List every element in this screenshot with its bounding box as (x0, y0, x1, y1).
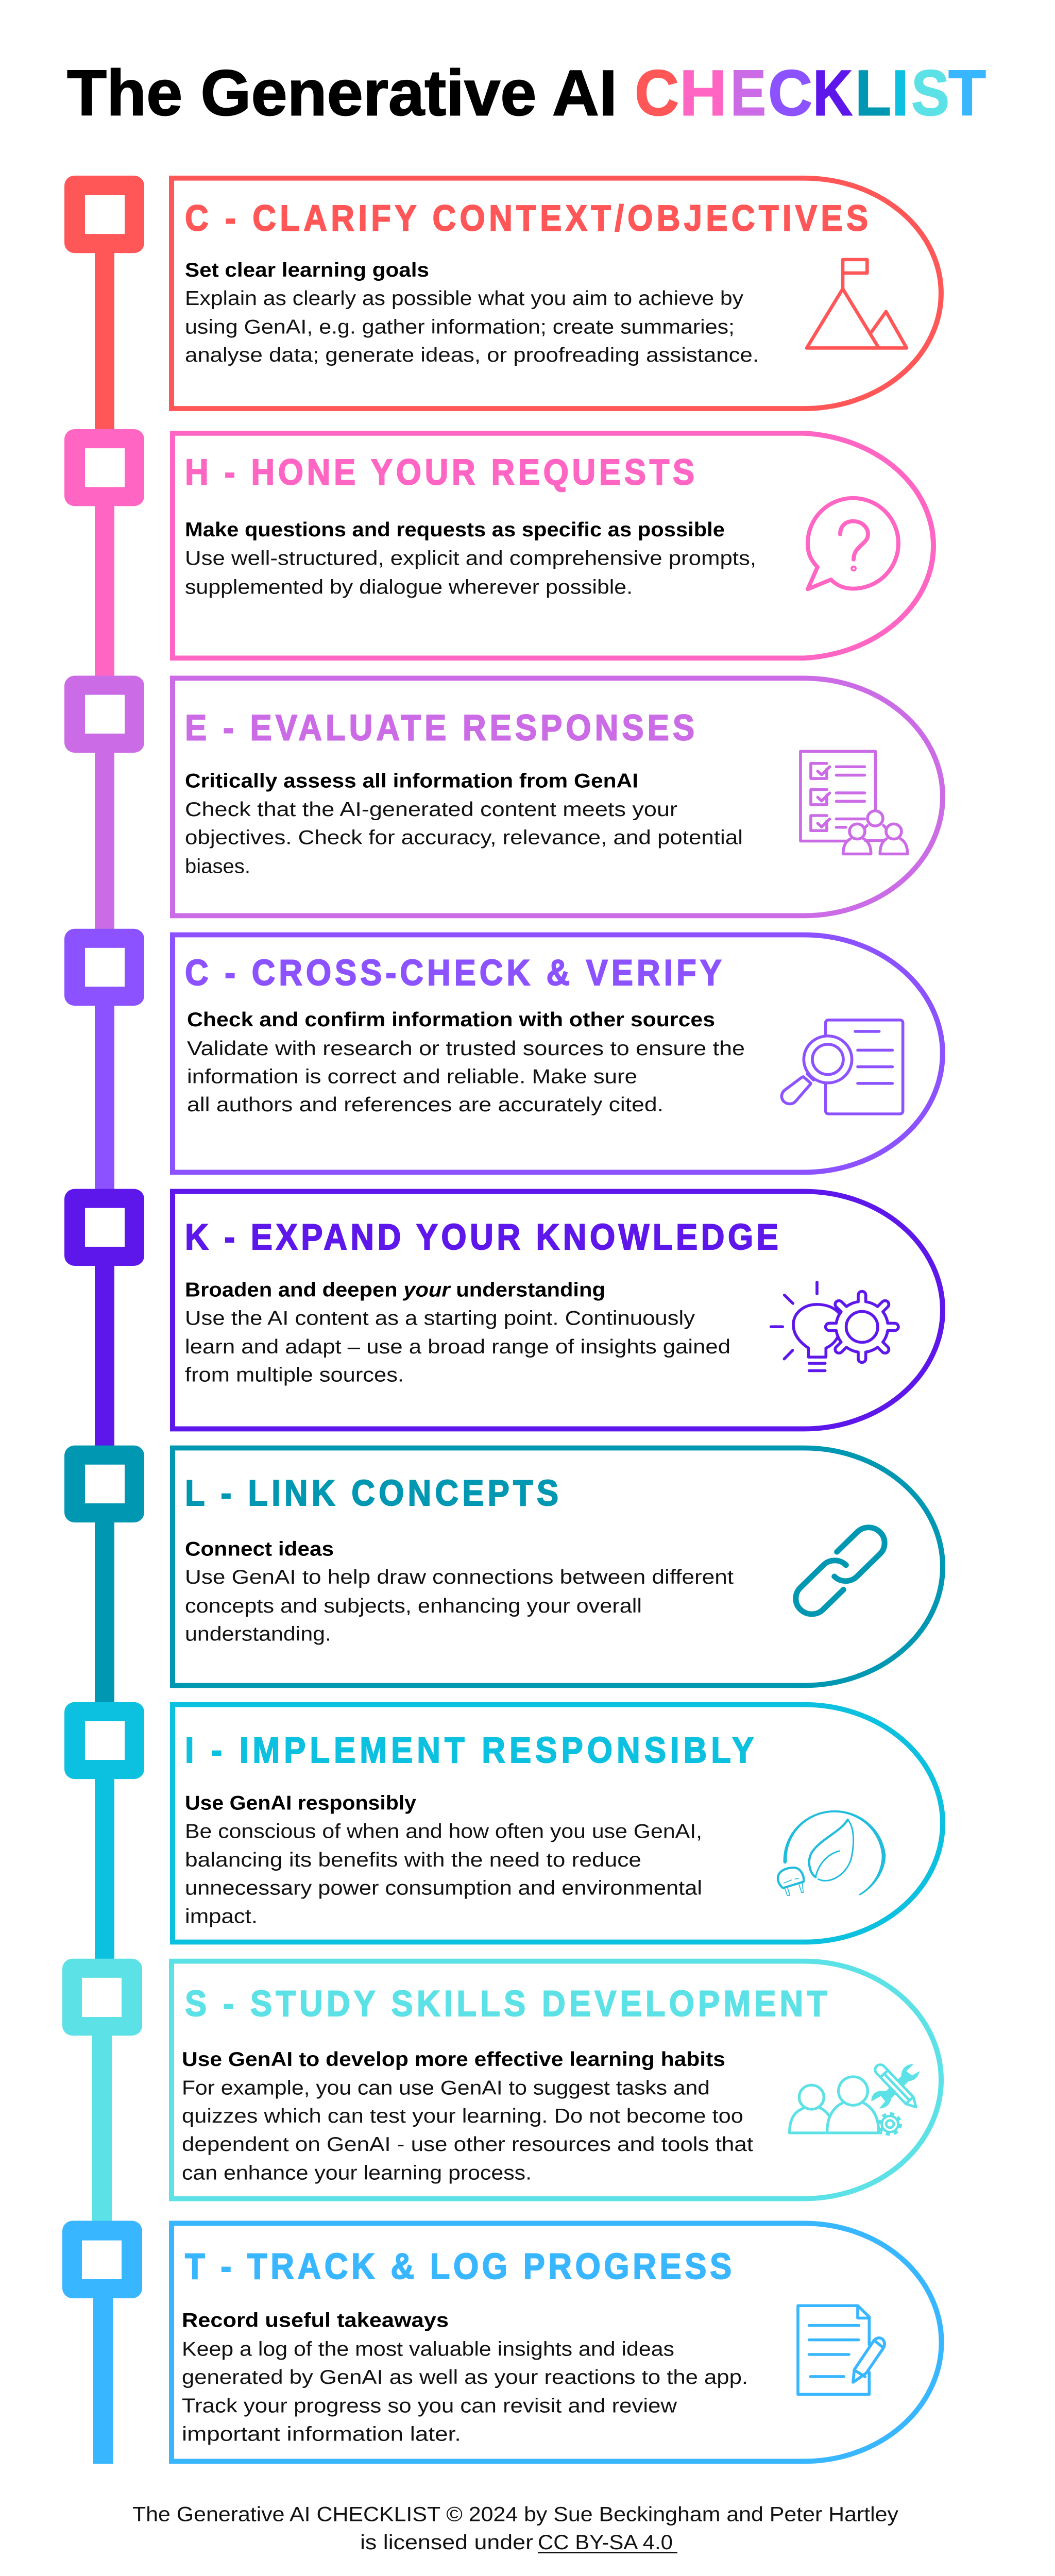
heading: C - CLARIFY CONTEXT/OBJECTIVES (185, 198, 868, 239)
title: C (768, 57, 812, 129)
footer credit: is licensed under (360, 2531, 533, 2554)
panel outline (172, 2223, 942, 2461)
icon: chain link (789, 1521, 891, 1621)
body text: Use GenAI to help draw connections between different (185, 1566, 734, 1588)
timeline node: C clarify (64, 176, 144, 431)
title: T (948, 57, 986, 129)
body text: unnecessary power consumption and environmental (185, 1877, 702, 1900)
body text: Explain as clearly as possible what you aim to achieve by (185, 287, 743, 310)
body text: objectives. Check for accuracy, relevance, and potential (185, 826, 743, 849)
title: L (855, 57, 891, 129)
timeline node: S study (62, 1959, 142, 2222)
timeline node: T track (62, 2221, 142, 2464)
title: S (911, 57, 949, 129)
body text: Use well-structured, explicit and comprehensive prompts, (185, 547, 756, 570)
body text: using GenAI, e.g. gather information; create summaries; (185, 316, 735, 338)
subheading: Broaden and deepen your understanding (185, 1279, 605, 1301)
body text (185, 287, 759, 366)
footer credit: The Generative AI CHECKLIST © 2024 by Sue Beckingham and Peter Hartley (132, 2502, 899, 2526)
icon: speech bubble with question mark (808, 498, 898, 589)
panel outline (173, 935, 943, 1172)
panel: C cross-check and verify (173, 935, 943, 1172)
panel outline (173, 433, 933, 658)
body text: from multiple sources. (185, 1364, 404, 1386)
subheading: Use GenAI to develop more effective learning habits (182, 2048, 725, 2071)
panel: H hone requests (173, 433, 933, 658)
subheading: Record useful takeaways (182, 2309, 449, 2331)
title: C (635, 57, 679, 129)
body text (187, 1037, 745, 1116)
title: K (813, 57, 853, 129)
subheading: Connect ideas (185, 1538, 334, 1560)
icon: document and pencil (798, 2306, 884, 2394)
body text: For example, you can use GenAI to suggest tasks and (182, 2077, 710, 2099)
title: The Generative AI (67, 57, 617, 129)
body text (185, 547, 756, 598)
body text (185, 1820, 702, 1927)
subheading: Make questions and requests as specific as possible (185, 518, 725, 541)
body text: balancing its benefits with the need to reduce (185, 1849, 641, 1871)
body text: impact. (185, 1905, 258, 1927)
subheading: Check and confirm information with other sources (187, 1009, 715, 1031)
body text (182, 2077, 753, 2184)
timeline node: C cross-check (64, 929, 144, 1191)
body text: Be conscious of when and how often you use GenAI, (185, 1820, 702, 1842)
icon: mountain with flag (807, 260, 907, 348)
body text: important information later. (182, 2423, 461, 2445)
body text: concepts and subjects, enhancing your overall (185, 1595, 642, 1617)
body text (185, 798, 743, 877)
title: I (892, 57, 909, 129)
body text: Validate with research or trusted sources to ensure the (187, 1037, 745, 1060)
body text: Track your progress so you can revisit and review (182, 2395, 677, 2417)
panel: E evaluate responses (173, 678, 943, 916)
body text: dependent on GenAI - use other resources and tools that (182, 2133, 753, 2156)
subheading: Critically assess all information from GenAI (185, 770, 638, 792)
footer credit: CC BY-SA 4.0 (538, 2531, 673, 2554)
body text (185, 1566, 734, 1645)
body text: quizzes which can test your learning. Do not become too (182, 2105, 743, 2127)
panel: I implement responsibly (173, 1705, 943, 1942)
body text: Use the AI content as a starting point. Continuously (185, 1307, 695, 1329)
panel outline (172, 178, 941, 409)
timeline node: H hone (64, 429, 144, 677)
body text: supplemented by dialogue wherever possible. (185, 576, 633, 598)
timeline node: K knowledge (64, 1189, 144, 1447)
body text: biases. (185, 855, 250, 877)
body text (185, 1307, 730, 1386)
heading: L - LINK CONCEPTS (185, 1473, 558, 1514)
heading: S - STUDY SKILLS DEVELOPMENT (185, 1984, 827, 2024)
subheading: Set clear learning goals (185, 259, 429, 281)
panel: T track and log progress (172, 2223, 942, 2461)
heading: T - TRACK & LOG PROGRESS (185, 2246, 731, 2287)
heading: E - EVALUATE RESPONSES (185, 707, 694, 748)
subheading: Use GenAI responsibly (185, 1792, 416, 1815)
icon: people, tools and gear (790, 2063, 920, 2134)
heading: H - HONE YOUR REQUESTS (185, 452, 694, 493)
timeline node: L link (64, 1446, 144, 1704)
panel outline (173, 1448, 943, 1685)
title: E (730, 57, 766, 129)
body text: can enhance your learning process. (182, 2162, 532, 2184)
body text: learn and adapt – use a broad range of insights gained (185, 1335, 730, 1358)
panel outline (173, 1191, 943, 1429)
body text: Check that the AI-generated content meets your (185, 798, 677, 821)
icon: magnifier over document (781, 1020, 903, 1114)
title: H (679, 57, 727, 129)
timeline node: E evaluate (64, 676, 144, 930)
body text: understanding. (185, 1623, 331, 1645)
panel outline (172, 1961, 941, 2199)
icon: checklist and people (801, 751, 908, 854)
body text: analyse data; generate ideas, or proofreading assistance. (185, 344, 759, 366)
body text: generated by GenAI as well as your reactions to the app. (182, 2366, 748, 2388)
panel: L link concepts (173, 1448, 943, 1685)
footer credit (132, 2502, 899, 2554)
panel outline (173, 1705, 943, 1942)
timeline node: I implement (64, 1702, 144, 1960)
heading: C - CROSS-CHECK & VERIFY (185, 953, 722, 993)
panel outline (173, 678, 943, 916)
title (67, 57, 986, 129)
body text (182, 2338, 748, 2445)
icon: light bulb and gear (771, 1282, 899, 1370)
heading: K - EXPAND YOUR KNOWLEDGE (185, 1217, 778, 1258)
panel: S study skills development (172, 1961, 941, 2199)
panel: C clarify context (172, 178, 941, 409)
heading: I - IMPLEMENT RESPONSIBLY (185, 1730, 754, 1771)
panel: K expand knowledge (173, 1191, 943, 1429)
body text: all authors and references are accurately cited. (187, 1094, 663, 1116)
body text: Keep a log of the most valuable insights and ideas (182, 2338, 674, 2360)
body text: information is correct and reliable. Make sure (187, 1065, 637, 1088)
icon: leaf and plug (778, 1810, 886, 1895)
